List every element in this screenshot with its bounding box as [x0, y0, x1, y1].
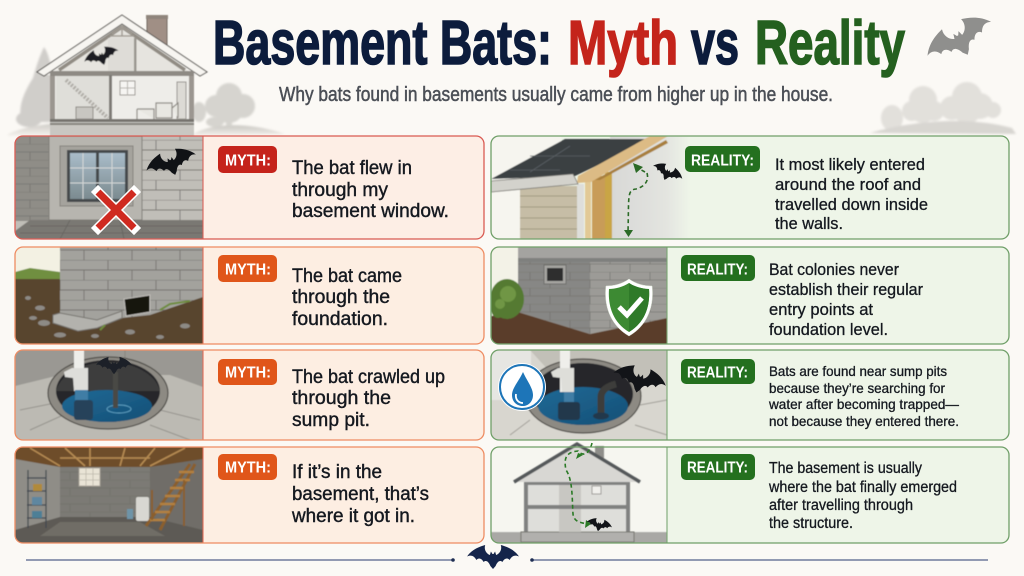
title: Basement Bats:	[213, 9, 552, 78]
reality text: It most likely entered	[775, 156, 925, 174]
reality text: establish their regular	[769, 280, 923, 299]
bat in attic	[82, 43, 121, 70]
myth badge	[218, 146, 277, 173]
reality badge	[681, 454, 755, 480]
myth text: The bat flew in	[292, 158, 412, 179]
reality text	[775, 156, 928, 233]
top-right trees	[870, 82, 1016, 134]
reality text: water after becoming trapped—	[768, 396, 959, 412]
reality text: the walls.	[775, 215, 843, 233]
reality text: around the roof and	[775, 176, 921, 194]
myth text	[292, 158, 449, 222]
image: basement interior	[15, 447, 203, 543]
left background trees	[8, 47, 100, 136]
icon: water drop badge	[498, 363, 546, 411]
icon: bat	[610, 361, 669, 399]
reality badge: REALITY:	[691, 152, 754, 170]
reality text: Bat colonies never	[769, 260, 899, 279]
header house cutaway illustration	[37, 15, 207, 136]
image: foundation wall with vent	[15, 247, 203, 344]
image: sump pit with bat	[491, 350, 667, 440]
myth text: through my	[292, 180, 389, 201]
myth badge: MYTH:	[225, 262, 271, 278]
panel: myth 1	[15, 136, 484, 239]
panel: myth 3	[15, 350, 484, 440]
icon: bat	[143, 143, 200, 183]
reality badge: REALITY:	[687, 460, 748, 476]
panel: reality 2	[490, 247, 1009, 344]
reality badge	[685, 146, 760, 172]
myth text: basement window.	[292, 201, 449, 222]
reality badge: REALITY:	[687, 364, 748, 382]
footer rule with bat	[26, 545, 988, 569]
myth text: through the	[292, 287, 390, 308]
reality badge	[681, 255, 755, 281]
right-of-house trees	[190, 83, 285, 136]
image: roof eave and wall cavity	[491, 136, 690, 239]
reality text: travelled down inside	[775, 196, 928, 214]
house cross section	[514, 444, 640, 542]
reality text: the structure.	[769, 515, 853, 532]
top-right grey bat	[920, 7, 1000, 72]
myth text: If it’s in the	[292, 462, 382, 483]
image: house cross section	[492, 532, 666, 542]
arrowheads	[624, 163, 643, 237]
reality text: not because they entered there.	[769, 413, 959, 429]
reality text: Bats are found near sump pits	[769, 363, 947, 379]
reality text: The basement is usually	[769, 460, 922, 477]
icon: footer bat	[467, 545, 519, 569]
myth badge: MYTH:	[225, 152, 271, 170]
myth text: sump pit.	[292, 410, 370, 431]
myth text: through the	[292, 388, 391, 409]
image: foundation corner with shield	[490, 247, 667, 344]
panel: reality 4	[491, 443, 1009, 543]
panel: reality 1	[491, 136, 1009, 239]
myth text: foundation.	[292, 309, 388, 330]
myth badge	[218, 255, 277, 282]
icon: bat	[650, 159, 685, 186]
panel: reality 3	[491, 350, 1009, 440]
reality text: after travelling through	[769, 497, 913, 514]
icon: bat on pipe	[96, 357, 132, 374]
myth badge	[218, 454, 277, 480]
myth text	[292, 266, 402, 330]
reality text: foundation level.	[769, 320, 888, 339]
reality badge	[681, 359, 755, 384]
reality text	[768, 460, 957, 532]
myth badge: MYTH:	[225, 364, 271, 382]
reality text: because they’re searching for	[769, 380, 945, 396]
reality badge: REALITY:	[687, 262, 748, 278]
attic and roof	[37, 15, 207, 76]
chimney	[146, 15, 168, 46]
title: Reality	[755, 9, 905, 78]
myth badge: MYTH:	[225, 460, 271, 476]
panel: myth 4	[15, 447, 484, 543]
title: Myth	[568, 9, 678, 78]
icon: green shield check	[606, 279, 652, 336]
arrow: dashed path down wall	[628, 167, 648, 232]
image: basement window with red X	[15, 136, 203, 239]
reality text	[768, 363, 959, 429]
panel: myth 2	[15, 247, 484, 344]
myth text	[291, 462, 429, 527]
reality text	[769, 260, 923, 339]
myth text: where it got in.	[291, 506, 415, 527]
reality text: entry points at	[769, 300, 873, 319]
myth text: The bat crawled up	[292, 367, 445, 388]
subtitle: Why bats found in basements usually came from higher up in the house.	[279, 84, 833, 106]
myth badge	[218, 359, 277, 385]
arrowheads	[576, 453, 591, 528]
icon: red X	[98, 192, 134, 228]
house walls and floors	[50, 71, 194, 136]
image: sump pit	[15, 350, 203, 440]
reality text: where the bat finally emerged	[768, 479, 957, 496]
title: vs	[691, 9, 739, 78]
myth text: The bat came	[292, 266, 402, 287]
icon: bat	[585, 516, 613, 534]
myth text: basement, that’s	[292, 484, 429, 505]
arrow: dashed green route	[565, 443, 592, 524]
myth text	[292, 367, 445, 431]
title	[213, 9, 905, 78]
